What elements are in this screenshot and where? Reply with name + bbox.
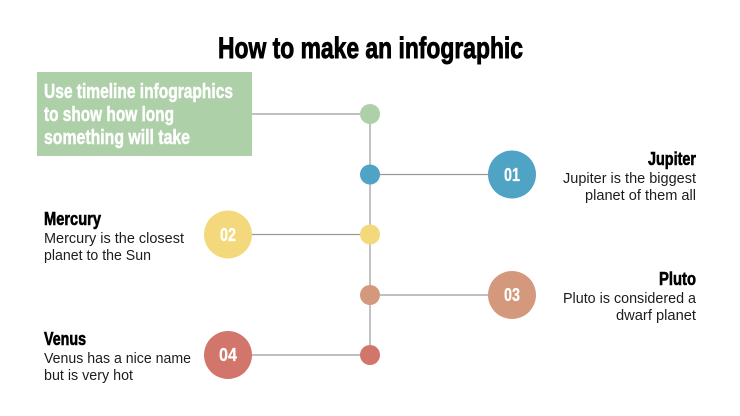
milestone 02: Mercury: 02 bbox=[220, 225, 236, 245]
milestone 02: Mercury: Mercury bbox=[44, 209, 101, 229]
callout: green text box: Use timeline infographics bbox=[44, 80, 233, 103]
milestone 03: Pluto: Pluto is considered a bbox=[563, 291, 697, 307]
callout: green text box: to show how long bbox=[44, 103, 174, 126]
milestone 01: Jupiter: 01 bbox=[504, 165, 520, 185]
milestone 02: Mercury: planet to the Sun bbox=[44, 248, 151, 264]
milestone 01: Jupiter: Jupiter bbox=[648, 149, 696, 169]
milestone 04: Venus: Venus bbox=[44, 329, 86, 349]
timeline vertical axis bbox=[369, 114, 371, 355]
milestone 03: Pluto: Pluto bbox=[659, 269, 696, 289]
milestone 04: Venus: 04 bbox=[219, 345, 237, 365]
connector and node: green bbox=[252, 104, 380, 124]
milestone 01: Jupiter: planet of them all bbox=[585, 188, 696, 204]
milestone 03: Pluto: dwarf planet bbox=[616, 308, 696, 324]
milestone 01: Jupiter bbox=[360, 149, 696, 204]
callout: green text box: something will take bbox=[44, 126, 190, 149]
milestone 04: Venus bbox=[44, 329, 380, 384]
milestone 02: Mercury bbox=[44, 209, 380, 264]
milestone 03: Pluto: 03 bbox=[504, 285, 520, 305]
milestone 04: Venus: Venus has a nice name bbox=[44, 351, 191, 367]
milestone 01: Jupiter: Jupiter is the biggest bbox=[563, 171, 696, 187]
milestone 03: Pluto bbox=[360, 269, 697, 324]
milestone 04: Venus: but is very hot bbox=[44, 368, 133, 384]
milestone 02: Mercury: Mercury is the closest bbox=[44, 231, 184, 247]
title: How to make an infographic bbox=[218, 32, 523, 65]
callout: green text box bbox=[37, 72, 252, 156]
